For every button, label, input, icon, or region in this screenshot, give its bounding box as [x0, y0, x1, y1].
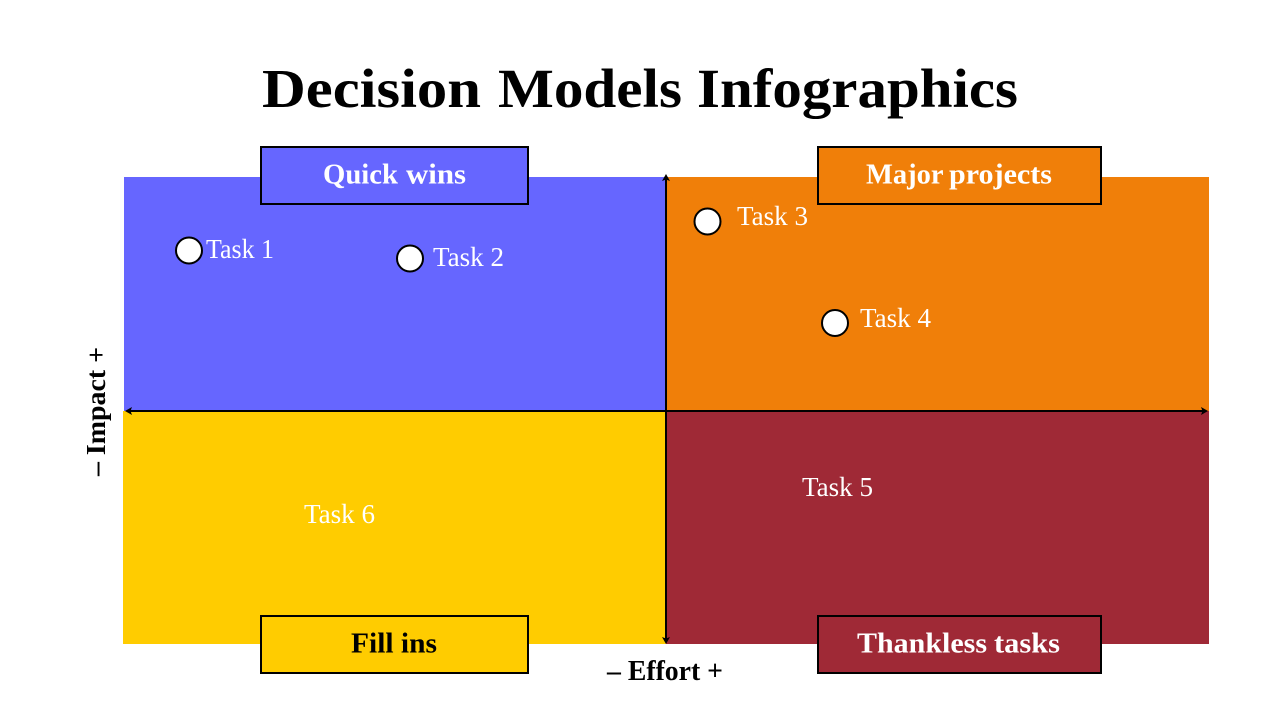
title: Decision	[262, 58, 481, 119]
y-axis label: impact: – Impact +	[81, 347, 111, 477]
label: major projects: Major	[866, 160, 943, 190]
arrow: horizontal impact axis	[125, 407, 1208, 415]
x-axis label: effort: – Effort +	[606, 656, 723, 687]
label: quick wins: wins	[406, 160, 466, 190]
task 1 text: Task 1	[206, 234, 274, 264]
label: fill ins: Fill ins	[351, 628, 437, 660]
title: Infographics	[697, 58, 1018, 119]
arrow: vertical effort axis	[662, 174, 670, 644]
panel: thankless tasks quadrant	[666, 411, 1209, 644]
panel: fill ins quadrant	[123, 411, 666, 644]
panel: quick wins quadrant	[124, 177, 666, 411]
label: thankless tasks	[818, 616, 1101, 673]
task 5 text: Task 5	[802, 472, 873, 502]
task 4 marker	[822, 310, 848, 336]
label: major projects	[818, 147, 1101, 204]
label: major projects: projects	[949, 160, 1052, 190]
panel: major projects quadrant	[666, 177, 1209, 411]
task 2 marker	[397, 246, 423, 272]
label: quick wins: Quick	[323, 160, 398, 190]
task 4 text: Task 4	[860, 303, 931, 333]
task 2 text: Task 2	[433, 242, 504, 272]
title: Models	[498, 58, 682, 119]
label: thankless tasks: tasks	[994, 628, 1060, 660]
label: quick wins	[261, 147, 528, 204]
task 6 text: Task 6	[304, 499, 375, 529]
task 1 marker	[176, 238, 202, 264]
label: fill ins	[261, 616, 528, 673]
task 3 marker	[694, 208, 720, 234]
task 3 text: Task 3	[737, 201, 808, 231]
label: thankless tasks: Thankless	[857, 628, 987, 660]
